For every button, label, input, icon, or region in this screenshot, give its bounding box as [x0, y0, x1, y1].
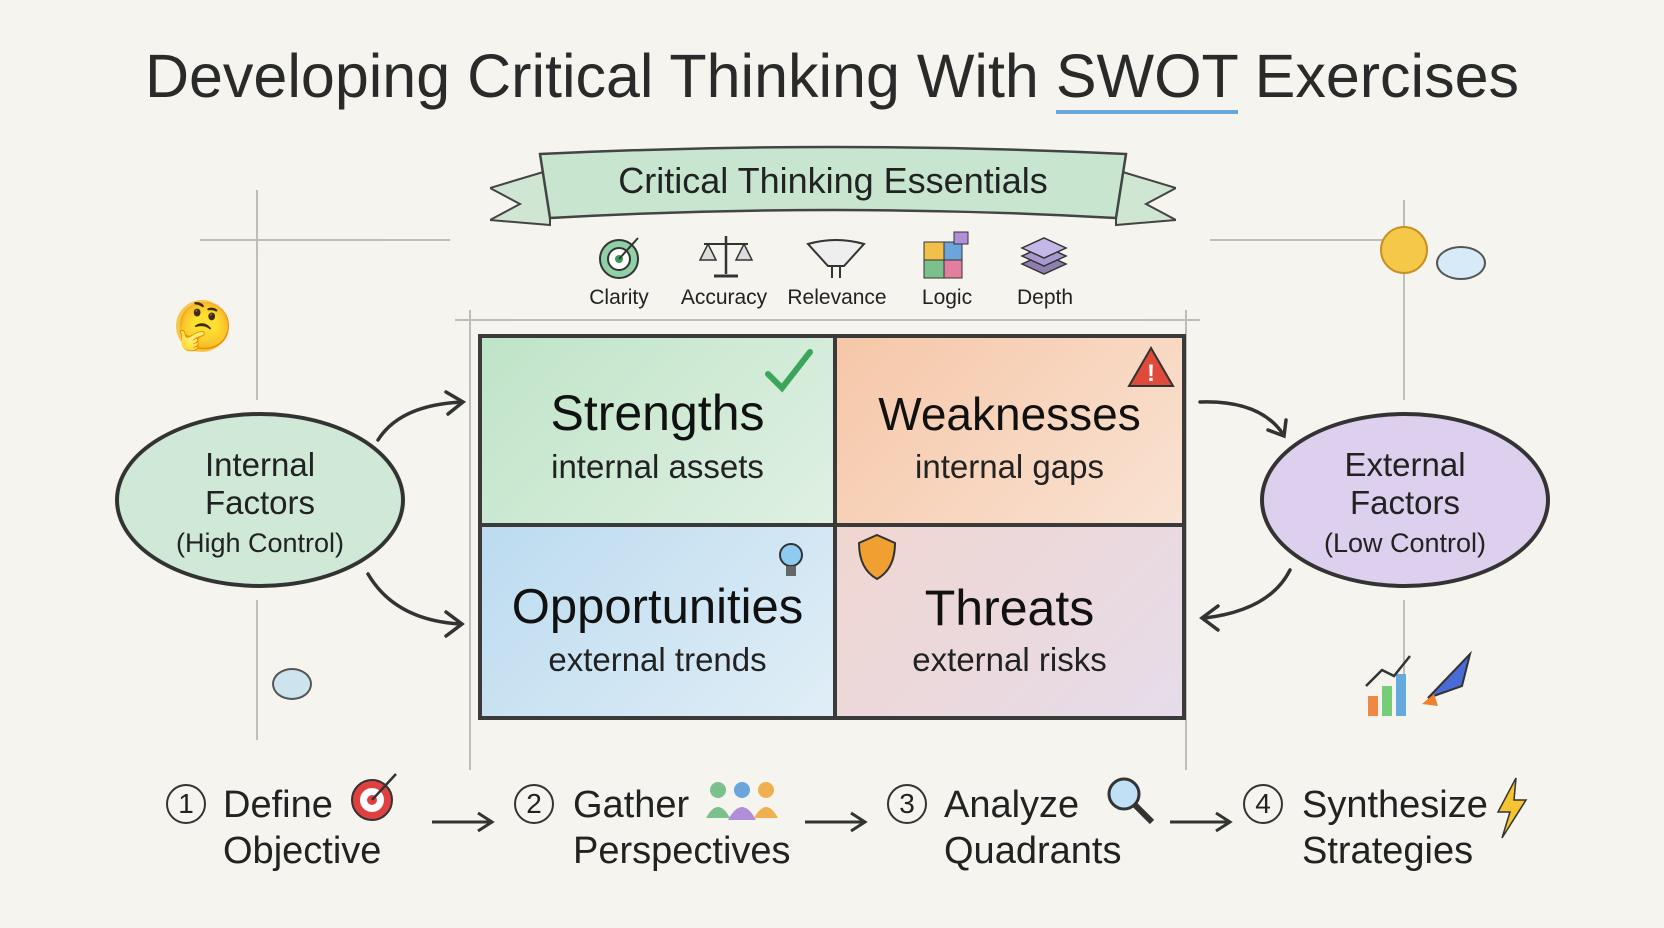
- external factors ellipse: [1260, 412, 1550, 588]
- internal factors ellipse: (High Control): [176, 528, 344, 558]
- quadrant: opportunities: [482, 527, 833, 716]
- external factors ellipse: External: [1344, 446, 1466, 483]
- quadrant: opportunities: Opportunities: [512, 580, 803, 634]
- icons row: essentials: Depth: [1017, 286, 1073, 309]
- step 4: 4: [1255, 788, 1271, 819]
- icons row: essentials: [589, 232, 1073, 309]
- quadrant: threats: [837, 527, 1182, 716]
- title: Developing Critical Thinking With SWOT Exercises: [145, 42, 1519, 110]
- external factors ellipse: Factors: [1350, 484, 1460, 521]
- icons row: essentials: Logic: [922, 286, 972, 309]
- labels: Clarity: [589, 286, 649, 309]
- process steps: Objective: [223, 830, 381, 872]
- icon: logic puzzle: [924, 232, 968, 278]
- quadrant: threats: Threats: [925, 580, 1094, 636]
- quadrant: threats: external risks: [912, 641, 1107, 678]
- quadrant: weaknesses: internal gaps: [915, 448, 1104, 485]
- icons row: essentials: Accuracy: [681, 286, 767, 309]
- internal factors ellipse: [115, 412, 405, 588]
- icon: chart and rocket: [1365, 650, 1472, 716]
- emoji: surprised face with thought: [1380, 226, 1486, 280]
- step 4: [1243, 784, 1283, 824]
- process steps: Strategies: [1302, 830, 1473, 872]
- quadrant: opportunities: external trends: [548, 641, 767, 678]
- process steps: [166, 773, 1528, 872]
- quadrant: strengths: Strengths: [550, 385, 764, 441]
- icon: relevance sieve: [806, 239, 866, 278]
- arrow: [1170, 812, 1233, 832]
- emoji: thinking face: 🤔: [176, 300, 233, 352]
- step 3: 3: [899, 788, 915, 819]
- process steps: Perspectives: [573, 830, 791, 872]
- process steps: Analyze: [944, 784, 1079, 826]
- icon: accuracy scale: [698, 236, 754, 278]
- step 2: [514, 784, 554, 824]
- icons row: essentials: Relevance: [787, 286, 887, 309]
- step 3: [887, 784, 927, 824]
- quadrant: weaknesses: [837, 338, 1182, 523]
- icon: clarity target: [599, 237, 639, 279]
- quadrant: weaknesses: Weaknesses: [878, 388, 1141, 440]
- process steps: Quadrants: [944, 830, 1121, 872]
- process steps: Define: [223, 784, 333, 826]
- external factors ellipse: (Low Control): [1324, 528, 1486, 558]
- banner: critical thinking essentials: Critical Thinking Essentials: [618, 160, 1048, 201]
- banner: critical thinking essentials: [490, 146, 1176, 226]
- quadrant: weaknesses: !: [1147, 360, 1155, 387]
- internal factors ellipse: Factors: [205, 484, 315, 521]
- process steps: Synthesize: [1302, 784, 1488, 826]
- quadrant: strengths: [482, 338, 833, 523]
- step 2: 2: [526, 788, 542, 819]
- arrow: [432, 812, 495, 832]
- process steps: Gather: [573, 784, 689, 826]
- arrow: [805, 812, 868, 832]
- step 1: [166, 784, 206, 824]
- internal factors ellipse: Internal: [205, 446, 315, 483]
- quadrant: strengths: internal assets: [551, 448, 764, 485]
- step 1: 1: [178, 788, 194, 819]
- icon: speech bubble: [272, 668, 312, 700]
- icon: depth layers: [1020, 237, 1068, 275]
- swot grid: [478, 334, 1186, 720]
